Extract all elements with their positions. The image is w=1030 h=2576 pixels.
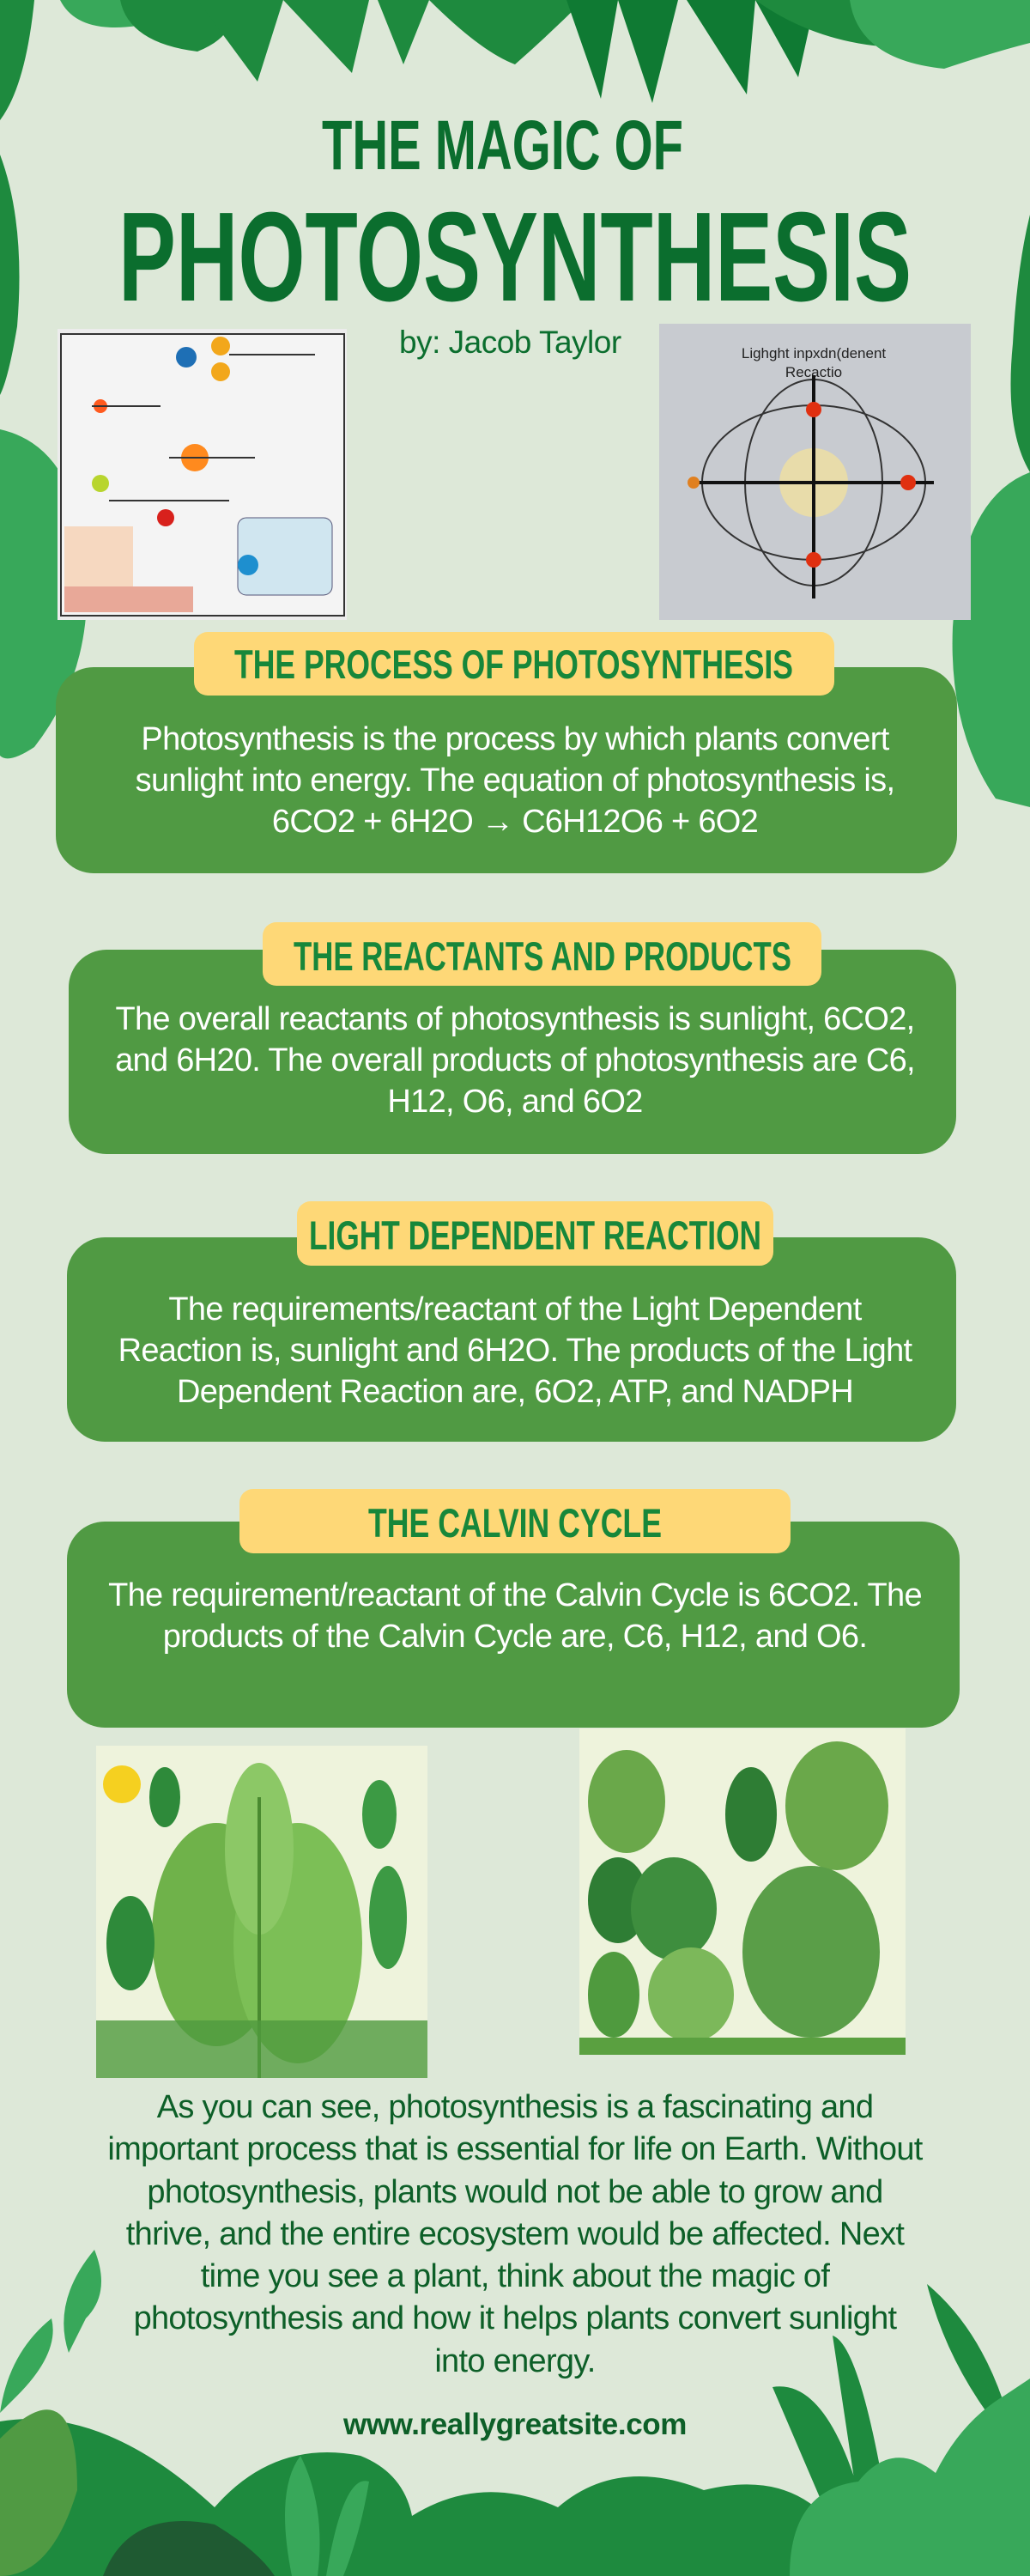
text: conclusion: into energy. [434, 2343, 596, 2379]
heading: calvin cycle [239, 1489, 791, 1553]
panel: reactants and products [69, 950, 956, 1154]
heading: light dependent reaction [297, 1201, 773, 1266]
text: reactants and products: H12, O6, and 6O2 [387, 1084, 643, 1120]
text: light dependent reaction: Dependent Reaction are, 6O2, ATP, and NADPH [177, 1374, 853, 1410]
text: process description: Photosynthesis is the process by which plants convert [141, 721, 889, 757]
text: process description [136, 721, 894, 840]
author byline: by: Jacob Taylor [399, 325, 621, 360]
panel: calvin cycle [67, 1522, 960, 1728]
text: calvin cycle: The requirement/reactant of the Calvin Cycle is 6CO2. The [108, 1577, 922, 1613]
decoration: right monstera leaf [953, 215, 1030, 807]
text: conclusion: photosynthesis, plants would not be able to grow and [147, 2174, 883, 2210]
text: conclusion [107, 2089, 924, 2379]
text: conclusion: important process that is essential for life on Earth. Without [107, 2131, 923, 2167]
image: leaves illustration right [579, 1728, 906, 2055]
text: calvin cycle [108, 1577, 922, 1655]
text: light dependent reaction [118, 1291, 912, 1410]
text: light dependent reaction: Reaction is, sunlight and 6H2O. The products of the Light [118, 1333, 912, 1369]
image: photosynthesis diagram [58, 329, 347, 620]
text: conclusion: As you can see, photosynthesis is a fascinating and [157, 2089, 873, 2125]
panel: process of photosynthesis [56, 667, 957, 873]
decoration: left monstera leaf [0, 155, 86, 759]
footer: website url: www.reallygreatsite.com [343, 2408, 687, 2441]
decoration: top leaves [0, 0, 1030, 120]
text: process description: sunlight into energy. The equation of photosynthesis is, [136, 762, 894, 799]
image: leaves illustration left [96, 1746, 427, 2078]
text: calvin cycle: products of the Calvin Cycle are, C6, H12, and O6. [163, 1619, 867, 1655]
text: reactants and products: The overall reactants of photosynthesis is sunlight, 6CO2, [115, 1001, 915, 1037]
text: reactants and products: and 6H20. The overall products of photosynthesis are C6, [115, 1042, 915, 1078]
panel: light dependent reaction [67, 1237, 956, 1442]
title: the magic of: THE MAGIC OF [322, 106, 683, 185]
image: light dependent reaction diagram: Lighght inpxdn(denent [742, 345, 886, 361]
text: conclusion: time you see a plant, think about the magic of [201, 2258, 829, 2294]
text: conclusion: thrive, and the entire ecosystem would be affected. Next [126, 2216, 904, 2252]
heading: calvin cycle: THE CALVIN CYCLE [368, 1500, 662, 1546]
heading: reactants and products [263, 922, 821, 986]
text: reactants and products [115, 1001, 915, 1120]
image: light dependent reaction diagram: Recactio [785, 364, 842, 380]
text: process description: 6CO2 + 6H2O → C6H12O6 + 6O2 [272, 804, 758, 840]
text: light dependent reaction: The requirements/reactant of the Light Dependent [168, 1291, 862, 1327]
decoration: bottom foliage [0, 2250, 1030, 2576]
heading: the process of photosynthesis [194, 632, 834, 696]
image: light dependent reaction diagram [659, 324, 971, 620]
text: conclusion: photosynthesis and how it helps plants convert sunlight [134, 2300, 896, 2336]
